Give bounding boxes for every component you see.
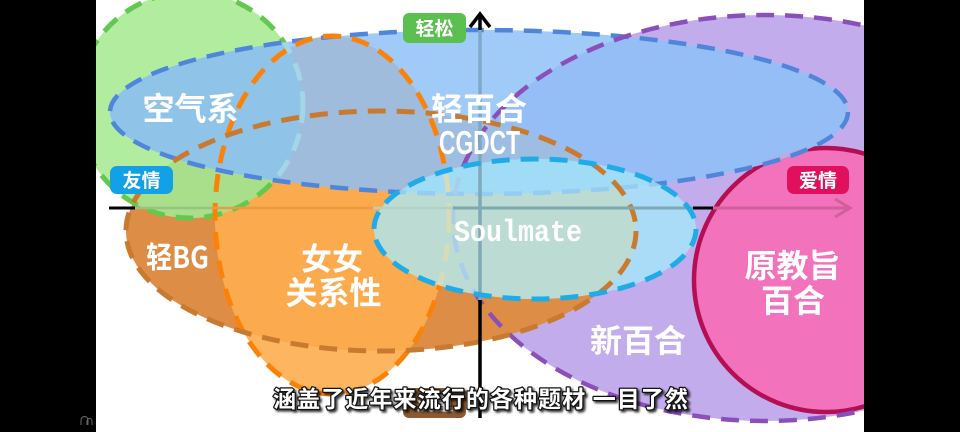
subtitle: 涵盖了近年来流行的各种题材 一目了然	[273, 380, 688, 414]
label: 爱情	[787, 166, 849, 194]
text: 新百合: 新百合	[590, 316, 686, 362]
label: 友情: 友情	[122, 166, 161, 193]
outline: 轻BG	[126, 111, 636, 351]
text: 女女关系性	[285, 234, 382, 314]
diagram	[96, 0, 864, 424]
region: 轻BG fill	[126, 204, 594, 350]
overlap: 女女关系性 and 轻BG	[215, 182, 438, 351]
outline: 新百合	[460, 12, 861, 424]
label: 轻松: 轻松	[415, 14, 454, 41]
text: 女女关系性: 关系性	[285, 268, 382, 314]
region: 原教旨百合 circle	[692, 146, 864, 414]
text: 原教旨百合	[744, 241, 841, 322]
page background	[96, 0, 864, 432]
region: 空气系 circle	[96, 0, 287, 220]
region: Soulmate fill	[374, 159, 696, 299]
region: 轻百合 fill	[110, 30, 848, 192]
text: CGDCT: CGDCT	[439, 124, 520, 161]
label: 爱情: 爱情	[799, 166, 837, 193]
icon: player logo	[81, 417, 92, 425]
label: 轻松	[403, 13, 466, 43]
text: 原教旨百合: 原教旨	[744, 241, 841, 287]
outline: Soulmate	[374, 159, 696, 299]
horizontal axis: 友情 to 爱情	[109, 199, 850, 217]
label: 沉重: 沉重	[415, 389, 454, 416]
label: 友情	[110, 166, 173, 194]
text: 原教旨百合: 百合	[761, 276, 825, 322]
region: 新百合 fill	[512, 15, 864, 421]
outline: 女女关系性	[215, 36, 449, 394]
label: 沉重	[403, 388, 466, 418]
text: 女女关系性: 女女	[301, 234, 363, 279]
text: 轻BG: 轻BG	[146, 233, 209, 277]
text: 空气系: 空气系	[142, 84, 239, 130]
outline: 轻百合	[110, 30, 848, 194]
text: Soulmate: Soulmate	[454, 216, 582, 251]
region: 女女关系性 fill	[215, 36, 449, 394]
vertical axis: 轻松 to 沉重	[470, 14, 490, 418]
text: 轻百合: 轻百合	[431, 84, 527, 130]
